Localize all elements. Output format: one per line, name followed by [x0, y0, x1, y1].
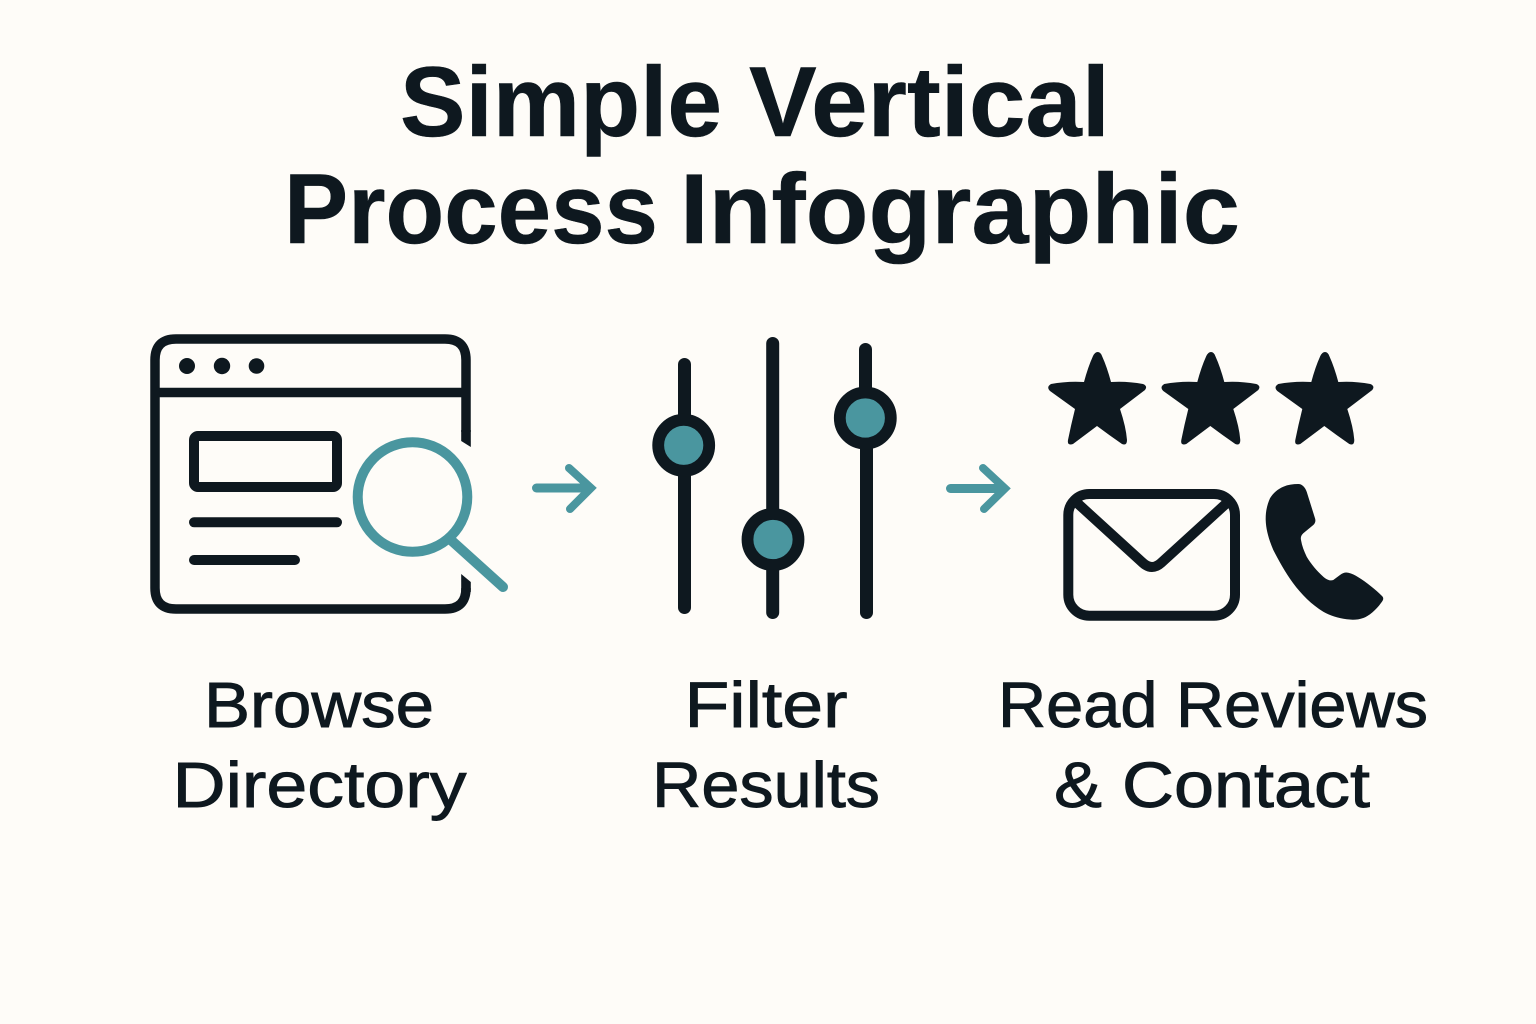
title: Simple [400, 46, 722, 157]
arrow: browse to filter [536, 468, 591, 509]
label: read reviews and contact: & Contact [1054, 749, 1370, 821]
magnifier [358, 442, 503, 587]
label: filter results [652, 669, 880, 821]
arrow: filter to reviews [950, 468, 1005, 509]
title: Vertical [749, 46, 1110, 157]
icon: envelope [1068, 494, 1235, 616]
label: read reviews and contact [998, 669, 1428, 821]
title: Process [284, 153, 658, 264]
label: browse directory: Directory [172, 749, 466, 821]
icon: browser window with magnifier [155, 339, 503, 609]
title [284, 46, 1240, 264]
title: Infographic [680, 153, 1240, 264]
label: browse directory: Browse [204, 669, 434, 741]
icon: phone [1266, 484, 1383, 620]
label: browse directory [172, 669, 466, 821]
label: filter results: Filter [684, 669, 848, 741]
icon: filter sliders [658, 344, 891, 612]
icon: three stars [1048, 352, 1373, 444]
browser window [155, 339, 471, 609]
label: filter results: Results [652, 749, 880, 821]
label: read reviews and contact: Read Reviews [998, 669, 1428, 741]
